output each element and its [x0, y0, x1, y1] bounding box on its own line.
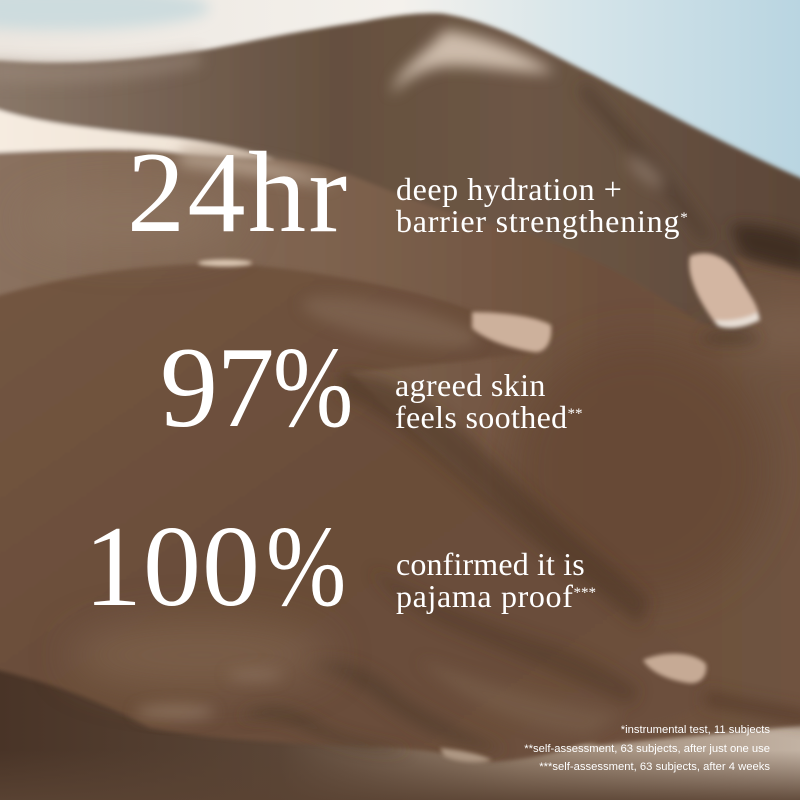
darker centre of forearm	[510, 340, 770, 600]
finger highlight	[198, 260, 252, 266]
upper forearm and back of hand	[0, 13, 800, 400]
knuckle fold 2	[305, 661, 505, 750]
pale band on upper arm	[0, 52, 200, 83]
text: deep hydration: barrier strengthening*	[396, 203, 688, 239]
text: confirmed: confirmed it is	[396, 546, 585, 582]
footnotes	[524, 724, 770, 773]
nail: bottom finger	[440, 748, 492, 762]
bright glare on forearm	[0, 107, 300, 175]
text: agreed skin: agreed skin	[395, 367, 546, 403]
stat: 97%: %	[273, 324, 353, 452]
forearm	[0, 149, 800, 745]
dark gap between finger and arm	[730, 224, 800, 272]
footnotes: **self-assessment, 63 subjects, after just one use	[524, 742, 770, 754]
blue sky top left	[0, 0, 210, 30]
stat: 100%: %	[266, 503, 346, 631]
light on lower finger	[298, 286, 482, 358]
lower finger ridge	[420, 660, 620, 735]
warm glow on lower hand	[70, 620, 330, 690]
stat: 100%	[84, 503, 346, 631]
knuckle fold 1	[240, 707, 410, 751]
text: agreed skin: feels soothed**	[395, 399, 583, 435]
footnotes: ***self-assessment, 63 subjects, after 4 weeks	[539, 761, 770, 773]
shadow under nail	[700, 332, 760, 344]
forearm rim below fingertip	[704, 690, 800, 725]
text: confirmed: pajama proof***	[396, 578, 596, 614]
sheen on finger joint	[624, 152, 666, 192]
nail: upper hand	[689, 253, 759, 327]
finger divider shadow	[372, 570, 640, 705]
text: agreed skin	[395, 367, 583, 435]
stat: 24hr: 24hr	[127, 129, 350, 257]
sparkle strip on forearm	[180, 150, 335, 185]
stat: 100%: 100	[84, 503, 261, 631]
nail: lower finger	[643, 654, 706, 683]
text: deep hydration: deep hydration +	[396, 171, 622, 207]
second finger shadow line	[578, 83, 714, 240]
sheen on knuckle	[392, 30, 555, 94]
text: deep hydration	[396, 171, 688, 239]
shadow under lower finger	[340, 372, 650, 625]
nail tip: upper hand	[714, 312, 760, 328]
stat: 97%	[160, 324, 353, 452]
footnotes: *instrumental test, 11 subjects	[621, 724, 770, 736]
pale edge on bottom of hand	[135, 704, 215, 720]
text: confirmed	[396, 546, 596, 614]
stat: 97%: 97	[160, 324, 273, 452]
lower hand	[0, 264, 707, 762]
nail: lower hand index	[472, 312, 551, 352]
